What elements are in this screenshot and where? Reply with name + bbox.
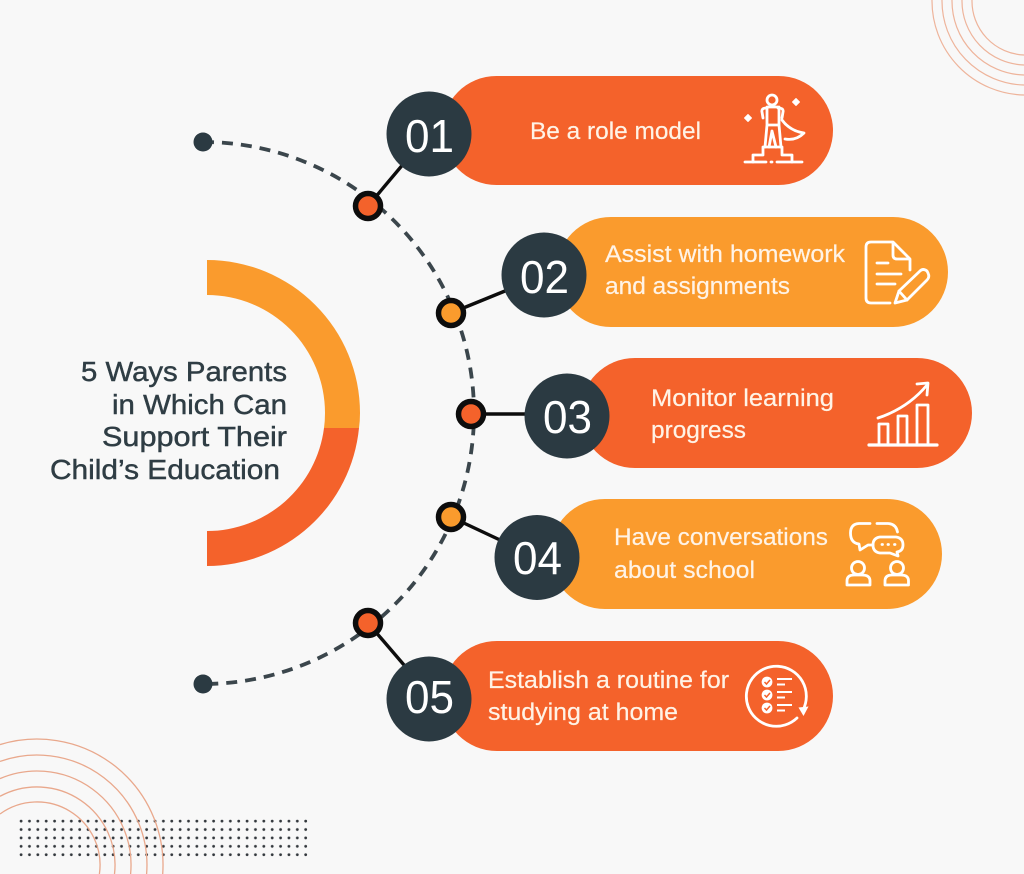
label 5: Establish a routine for: [488, 667, 729, 694]
number badge 3: [524, 374, 610, 458]
decoration: top right concentric arcs: [932, 0, 1024, 95]
label 2: and assignments: [605, 273, 790, 300]
title: [50, 356, 287, 485]
step 3: [458, 358, 972, 468]
pill 4: [550, 499, 942, 609]
label 3: [651, 385, 834, 444]
icon: rising bar chart: [869, 383, 937, 445]
pill 3: [580, 358, 972, 468]
number 4: 04: [513, 532, 562, 584]
number 5: 05: [405, 671, 454, 723]
icon: routine checklist: [746, 666, 808, 726]
half ring behind title: [207, 260, 360, 566]
number 3: 03: [543, 391, 592, 443]
node 4: [438, 504, 464, 530]
node 1: [356, 194, 380, 218]
step 2: [438, 217, 948, 327]
pill 2: [556, 217, 948, 327]
dashed timeline arc: [203, 142, 474, 684]
label 4: [614, 524, 828, 584]
label 5: studying at home: [488, 699, 678, 726]
title: Support Their: [102, 421, 287, 452]
label 3: progress: [651, 417, 746, 444]
label 4: about school: [614, 557, 755, 584]
timeline end dot: [194, 674, 212, 694]
icon: two people talking: [847, 524, 908, 585]
number badge 2: [502, 232, 586, 318]
label 4: Have conversations: [614, 524, 828, 551]
title: in Which Can: [112, 389, 287, 420]
node 3: [458, 402, 484, 426]
label 2: [605, 241, 846, 300]
connector 3: [471, 412, 530, 416]
label 1: Be a role model: [530, 118, 701, 145]
decoration: bottom left dot grid: [17, 817, 310, 859]
label 3: Monitor learning: [651, 385, 834, 412]
title: Child’s Education: [50, 454, 280, 485]
step 4: [438, 499, 942, 609]
number 2: 02: [520, 251, 569, 303]
connector 5: [368, 623, 410, 672]
label 5: [488, 667, 729, 726]
number 1: 01: [405, 110, 454, 162]
number badge 1: [386, 92, 472, 176]
step 1: [356, 76, 833, 218]
title: 5 Ways Parents: [81, 356, 287, 387]
pill 5: [442, 641, 833, 751]
label 2: Assist with homework: [605, 241, 846, 268]
decoration: bottom left concentric arcs: [0, 739, 163, 874]
icon: hero on pedestal: [744, 95, 804, 162]
connector 2: [451, 291, 505, 313]
icon: document and pencil: [866, 242, 929, 303]
node 5: [356, 610, 380, 636]
step 5: [356, 610, 833, 751]
pill 1: [442, 76, 833, 185]
number badge 5: [386, 656, 472, 742]
timeline start dot: [194, 132, 212, 152]
connector 4: [451, 517, 500, 540]
number badge 4: [494, 515, 580, 600]
node 2: [438, 300, 464, 326]
connector 1: [368, 156, 410, 206]
